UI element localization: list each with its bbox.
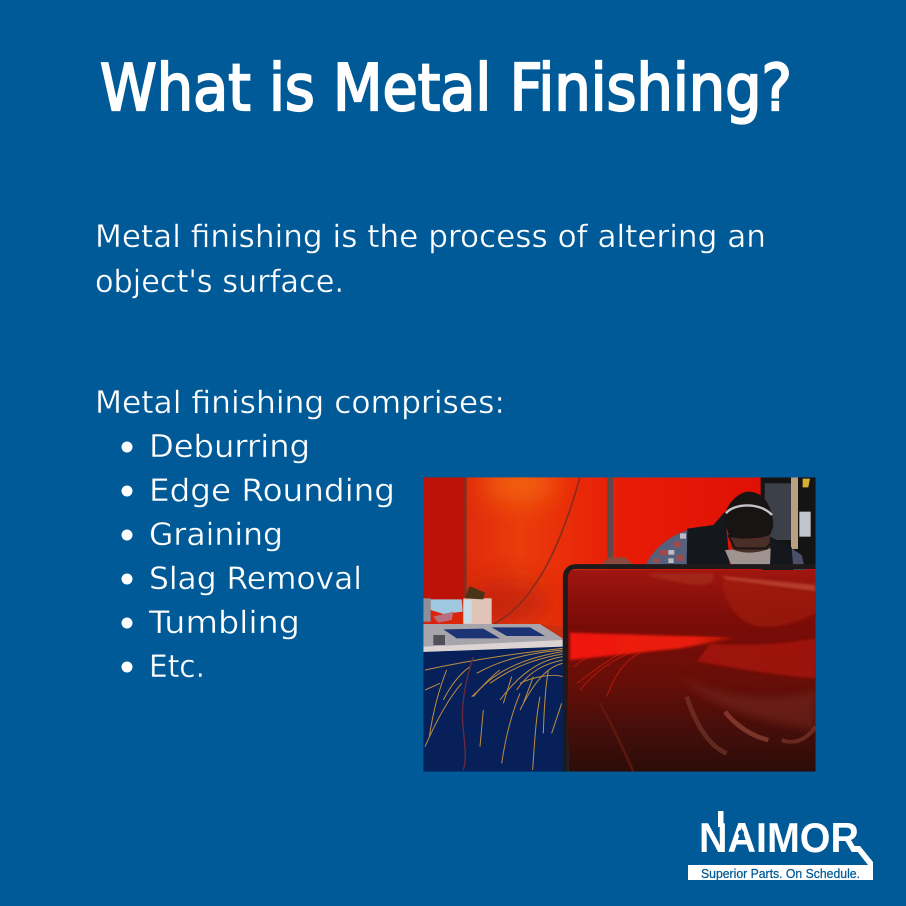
mask: [725, 548, 771, 566]
photo: metal grinding sparks behind red welding curtain: [423, 463, 816, 772]
plaid shirt left: [646, 530, 688, 564]
logo: NAIMOR: [688, 811, 873, 881]
sparks: [425, 648, 563, 770]
intro text block: [95, 219, 766, 300]
red curtain: [567, 570, 816, 772]
item: Slag Removal: Slag Removal: [149, 561, 362, 597]
infographic canvas: [96, 60, 873, 880]
logo R leg and tag bar: [688, 846, 873, 880]
bullet list: [122, 429, 395, 685]
intro text block: object's surface.: [95, 264, 344, 300]
vest: [687, 512, 730, 567]
logo wordmark: NAIMOR: [699, 814, 859, 861]
item: Etc.: Etc.: [149, 649, 205, 685]
item: Edge Rounding: Edge Rounding: [149, 473, 395, 509]
item: Etc.: [122, 649, 205, 685]
plaid right: [792, 548, 806, 570]
head: [724, 492, 773, 539]
curtain frame: [565, 567, 816, 772]
dark background equipment: [761, 477, 816, 566]
item: Deburring: Deburring: [149, 429, 310, 465]
intro text block: Metal finishing is the process of altering an: [95, 219, 766, 255]
red wall: [423, 477, 816, 644]
logo N tall stem: [718, 811, 724, 827]
logo A notch: [738, 830, 744, 836]
navy tablecloth: [423, 647, 563, 772]
list intro text: Metal finishing comprises:: [95, 385, 505, 421]
worker: [646, 492, 806, 570]
table with papers: [423, 598, 431, 622]
item: Graining: Graining: [149, 517, 283, 553]
title: What is Metal Finishing?: [100, 52, 792, 126]
item: Tumbling: Tumbling: [148, 605, 300, 641]
logo tagline: Superior Parts. On Schedule.: [701, 867, 860, 881]
